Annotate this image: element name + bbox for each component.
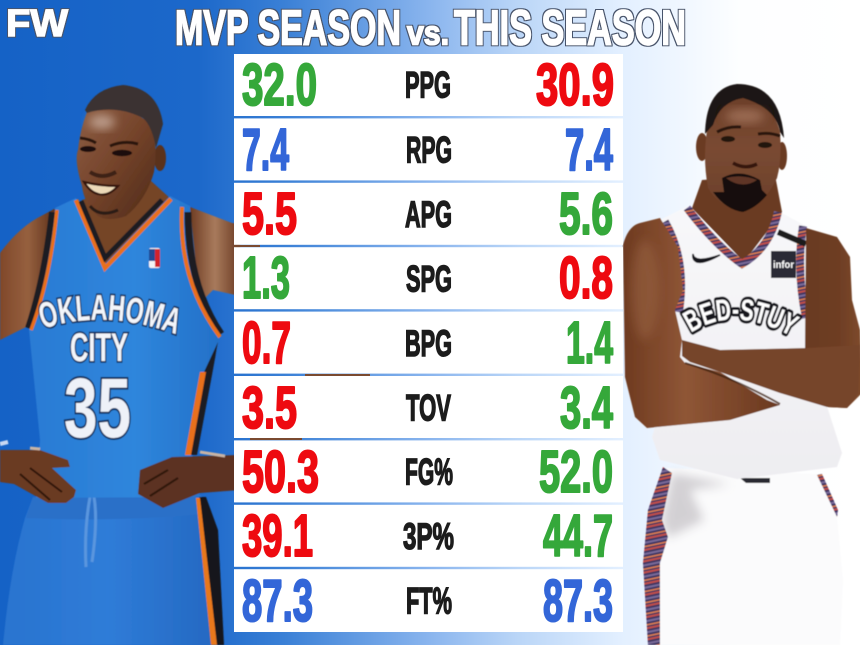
row: 3P% bbox=[234, 503, 623, 569]
left player hair bbox=[85, 85, 163, 148]
left player eyes bbox=[80, 146, 132, 156]
RPG this season value: 7.4 bbox=[565, 117, 613, 183]
row: FT% bbox=[234, 568, 623, 634]
right player armhole trim bbox=[664, 222, 680, 312]
RPG MVP season value: 7.4 bbox=[242, 117, 289, 183]
FG% MVP season value: 50.3 bbox=[242, 439, 319, 505]
left player arms bbox=[0, 207, 240, 340]
left player hands bbox=[0, 448, 240, 508]
left player ear bbox=[154, 145, 166, 171]
right player neck bbox=[692, 175, 782, 262]
FT% this season value: 87.3 bbox=[543, 568, 613, 634]
left player forehead highlight bbox=[89, 115, 115, 129]
right player shorts bbox=[648, 468, 843, 645]
title: vs.: vs. bbox=[407, 14, 449, 52]
left player head bbox=[77, 107, 156, 219]
infor patch bbox=[771, 251, 796, 278]
right player crossed forearm bbox=[682, 340, 860, 408]
left player drawstring bbox=[86, 497, 96, 567]
arm fragments visible in table gaps bbox=[234, 245, 370, 440]
TOV this season value: 3.4 bbox=[560, 375, 613, 441]
title: THIS SEASON: THIS SEASON bbox=[454, 2, 686, 56]
left player neck bbox=[82, 180, 172, 268]
FT% label: FT% bbox=[406, 580, 452, 622]
player: left, Oklahoma City jersey bbox=[0, 84, 240, 645]
row: RPG bbox=[234, 117, 623, 183]
SPG label: SPG bbox=[406, 258, 452, 300]
3P% MVP season value: 39.1 bbox=[242, 503, 313, 569]
FG% this season value: 52.0 bbox=[539, 439, 613, 505]
right player ears bbox=[696, 133, 787, 170]
right player upper arms bbox=[623, 218, 860, 428]
TOV MVP season value: 3.5 bbox=[242, 375, 297, 441]
right player nose bbox=[733, 163, 757, 167]
right player hair bbox=[705, 84, 784, 138]
left player logo patch bbox=[149, 248, 160, 268]
APG MVP season value: 5.5 bbox=[242, 181, 297, 247]
row: PPG bbox=[234, 52, 623, 118]
right player shorts trim bbox=[643, 467, 672, 645]
PPG this season value: 30.9 bbox=[536, 52, 614, 118]
infor patch: infor bbox=[773, 260, 794, 271]
jersey word OKLAHOMA: OKLAHOMA bbox=[38, 292, 180, 336]
jersey word CITY: CITY bbox=[70, 326, 128, 370]
player: right, Brooklyn Bed-Stuy jersey bbox=[622, 83, 860, 645]
right player waistband bbox=[740, 478, 770, 483]
row: SPG bbox=[234, 245, 623, 311]
right player jersey body bbox=[652, 206, 842, 479]
Nike swoosh bbox=[693, 254, 720, 262]
BPG this season value: 1.4 bbox=[566, 310, 613, 376]
left player side trim bbox=[187, 342, 218, 455]
PPG label: PPG bbox=[405, 64, 451, 106]
right player eyes bbox=[721, 136, 772, 148]
right player shorts shading bbox=[662, 473, 730, 538]
right player collar bbox=[687, 208, 778, 264]
title: MVP SEASON: MVP SEASON bbox=[175, 2, 401, 56]
right player arm shading bbox=[685, 363, 780, 404]
FG% label: FG% bbox=[405, 452, 453, 492]
BPG label: BPG bbox=[405, 323, 452, 364]
left player collar bbox=[76, 199, 171, 268]
left player wristband bbox=[0, 442, 8, 444]
left player shorts bbox=[3, 495, 213, 645]
jersey number 35: 35 bbox=[64, 361, 131, 455]
left player shorts waistband bbox=[26, 495, 205, 519]
left player goatee bbox=[90, 206, 118, 213]
SPG this season value: 0.8 bbox=[559, 245, 613, 311]
comparison table bbox=[234, 52, 623, 634]
3P% this season value: 44.7 bbox=[543, 503, 613, 569]
right player black band bbox=[778, 232, 806, 244]
jersey word BED-STUY: BED-STUY bbox=[679, 296, 803, 338]
3P% label: 3P% bbox=[403, 516, 454, 557]
SPG MVP season value: 1.3 bbox=[242, 245, 290, 311]
FW logo: FW bbox=[6, 3, 68, 45]
right player head bbox=[705, 96, 781, 212]
left player shorts side trim bbox=[199, 497, 224, 645]
left player jersey body bbox=[29, 196, 221, 498]
RPG label: RPG bbox=[406, 130, 452, 170]
row: APG bbox=[234, 181, 623, 247]
PPG MVP season value: 32.0 bbox=[242, 52, 317, 118]
right player lips bbox=[726, 176, 757, 185]
right player brows bbox=[717, 127, 780, 136]
left player armhole trim bbox=[28, 212, 52, 328]
BPG MVP season value: 0.7 bbox=[242, 310, 291, 376]
right player beard bbox=[713, 173, 767, 212]
FT% MVP season value: 87.3 bbox=[242, 568, 313, 634]
left player smile bbox=[84, 182, 118, 195]
right player forehead highlight bbox=[725, 109, 765, 123]
APG label: APG bbox=[405, 194, 452, 235]
left player nose bbox=[90, 172, 116, 176]
row: BPG bbox=[234, 310, 623, 376]
row: FG% bbox=[234, 439, 623, 505]
TOV label: TOV bbox=[406, 388, 451, 428]
row: TOV bbox=[234, 375, 623, 441]
title bbox=[175, 2, 686, 56]
APG this season value: 5.6 bbox=[559, 181, 613, 247]
left player brows bbox=[80, 138, 138, 146]
